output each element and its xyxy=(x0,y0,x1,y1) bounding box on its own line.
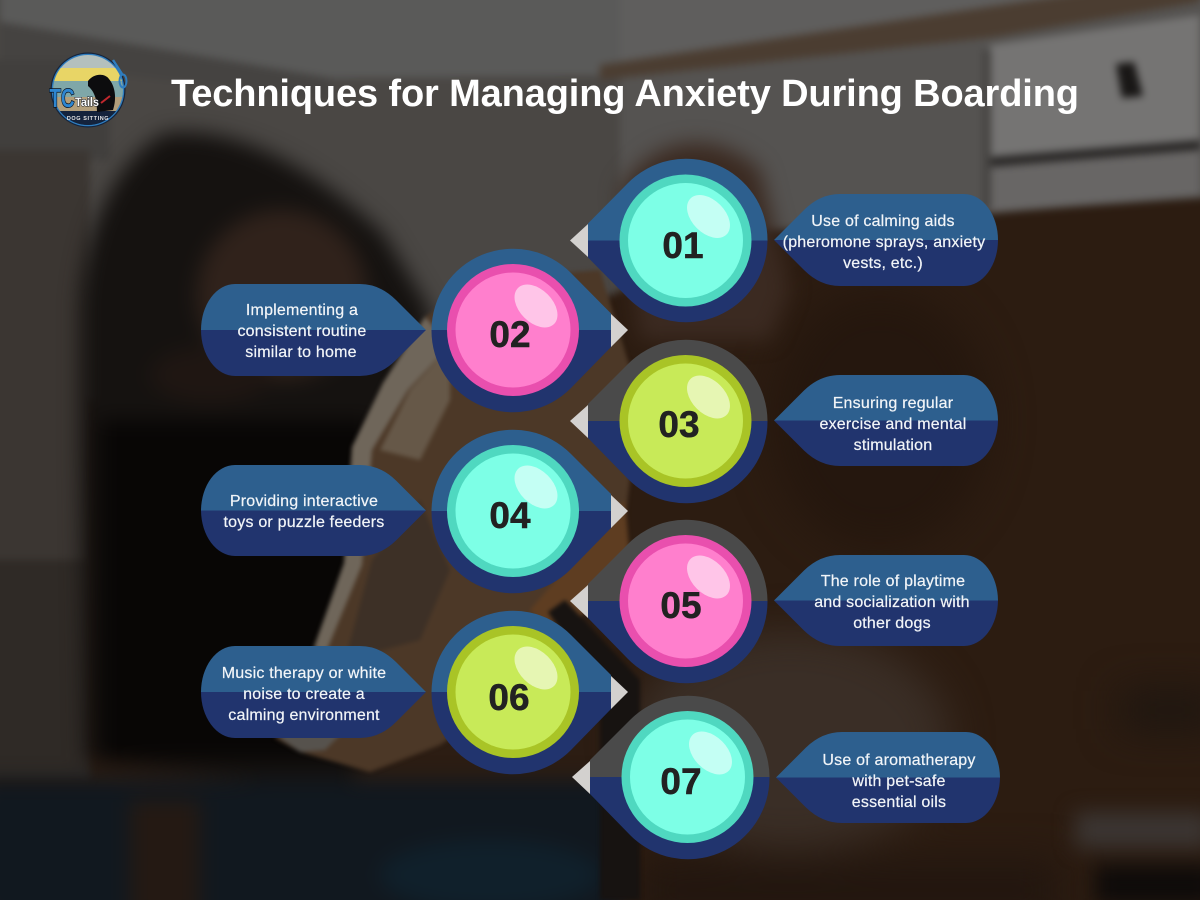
item 01 badge xyxy=(570,159,768,322)
hair xyxy=(80,132,430,790)
logo: DOG SITTING xyxy=(67,116,109,122)
item 07 badge: 07 xyxy=(660,761,702,802)
item 01 callout: (pheromone sprays, anxiety xyxy=(783,234,985,251)
item 05 callout: other dogs xyxy=(853,615,931,632)
item 01 badge: 01 xyxy=(662,225,704,266)
item 04 callout: toys or puzzle feeders xyxy=(224,514,384,531)
item 02 callout xyxy=(201,284,426,376)
item 07 callout: Use of aromatherapy xyxy=(822,752,976,769)
item 06 callout xyxy=(201,646,426,738)
item 05 callout: The role of playtime xyxy=(821,573,965,590)
dog body shading xyxy=(770,290,990,550)
item 05 callout: and socialization with xyxy=(814,594,970,611)
item 03 badge: 03 xyxy=(658,404,700,445)
item 02 badge xyxy=(431,249,628,412)
item 07 badge xyxy=(572,696,770,859)
item 01 callout: vests, etc.) xyxy=(843,255,923,272)
item 02 badge: 02 xyxy=(489,314,531,355)
item 01 callout: Use of calming aids xyxy=(811,213,955,230)
item 01 callout xyxy=(774,194,998,286)
item 06 callout: Music therapy or white xyxy=(222,665,386,682)
item 06 callout: noise to create a xyxy=(243,686,365,703)
item 06 badge: 06 xyxy=(488,677,530,718)
item 03 callout: Ensuring regular xyxy=(833,395,954,412)
logo: TC xyxy=(50,83,75,113)
item 05 badge: 05 xyxy=(660,585,702,626)
logo xyxy=(50,52,126,129)
face xyxy=(197,210,367,380)
item 04 callout: Providing interactive xyxy=(230,493,378,510)
item 03 callout: exercise and mental xyxy=(820,416,966,433)
item 04 badge: 04 xyxy=(489,495,531,536)
item 05 badge xyxy=(570,520,768,683)
item 07 callout: with pet-safe xyxy=(851,773,946,790)
hand on dog xyxy=(620,143,790,340)
dog head xyxy=(275,270,640,772)
title: Techniques for Managing Anxiety During Boarding xyxy=(171,73,1079,115)
item 03 callout: stimulation xyxy=(854,437,932,454)
room xyxy=(0,0,640,400)
item 02 callout: Implementing a xyxy=(246,302,358,319)
lower dog chest xyxy=(630,630,950,850)
item 02 callout: consistent routine xyxy=(237,323,367,340)
item 07 callout: essential oils xyxy=(852,794,946,811)
item 06 callout: calming environment xyxy=(228,707,380,724)
item 04 badge xyxy=(431,430,628,593)
item 05 callout xyxy=(774,555,998,646)
item 07 callout xyxy=(776,732,1000,823)
item 03 badge xyxy=(570,340,768,503)
logo: Tails xyxy=(75,95,99,109)
item 02 callout: similar to home xyxy=(245,344,357,361)
grey fabric xyxy=(1075,812,1200,848)
jeans and arm xyxy=(0,780,620,900)
item 03 callout xyxy=(774,375,998,466)
dog body xyxy=(600,197,1200,900)
item 04 callout xyxy=(201,465,426,556)
item 06 badge xyxy=(431,611,628,774)
